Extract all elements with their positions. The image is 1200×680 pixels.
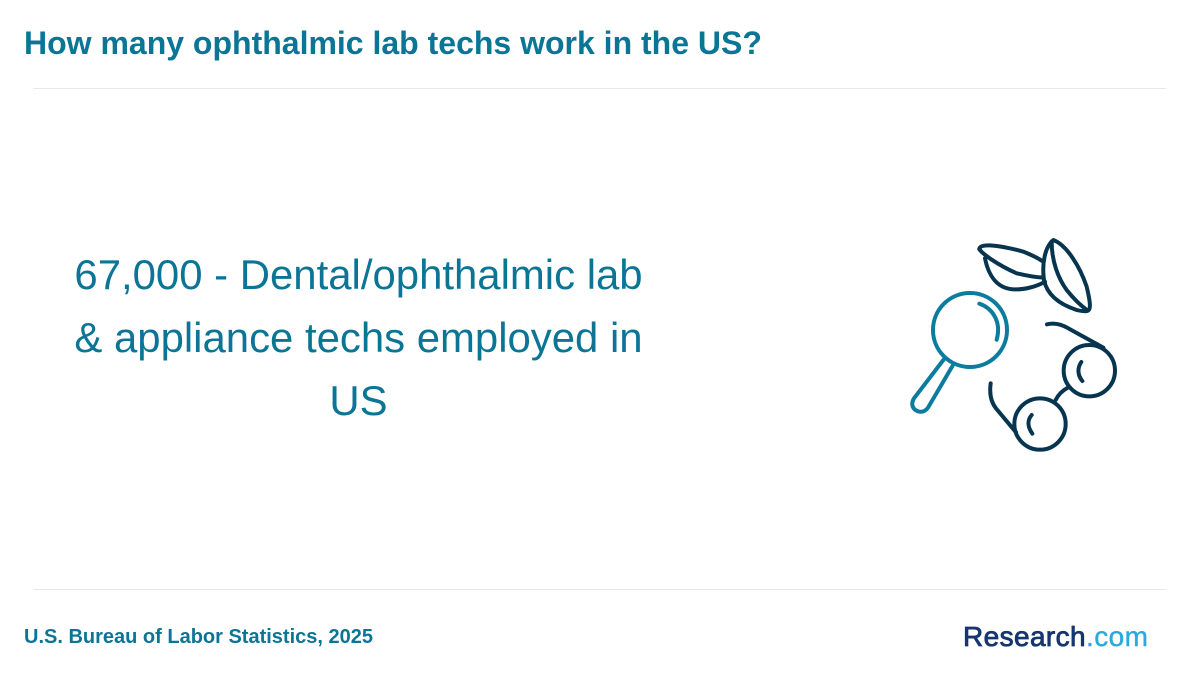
main statistic text: 67,000 - Dental/ophthalmic lab (74, 251, 643, 298)
main statistic text (74, 251, 643, 424)
icon: glasses (990, 324, 1115, 450)
icon: contact lenses (979, 240, 1090, 311)
icon: magnifying glass (912, 293, 1007, 412)
source citation: U.S. Bureau of Labor Statistics, 2025 (24, 626, 373, 648)
logo: Research.com: Research.com (963, 621, 1148, 652)
icon: contact lenses, magnifier and glasses (910, 238, 1117, 452)
main statistic text: & appliance techs employed in (74, 314, 643, 361)
main statistic text: US (329, 377, 388, 424)
title: How many ophthalmic lab techs work in the US? (24, 25, 762, 61)
